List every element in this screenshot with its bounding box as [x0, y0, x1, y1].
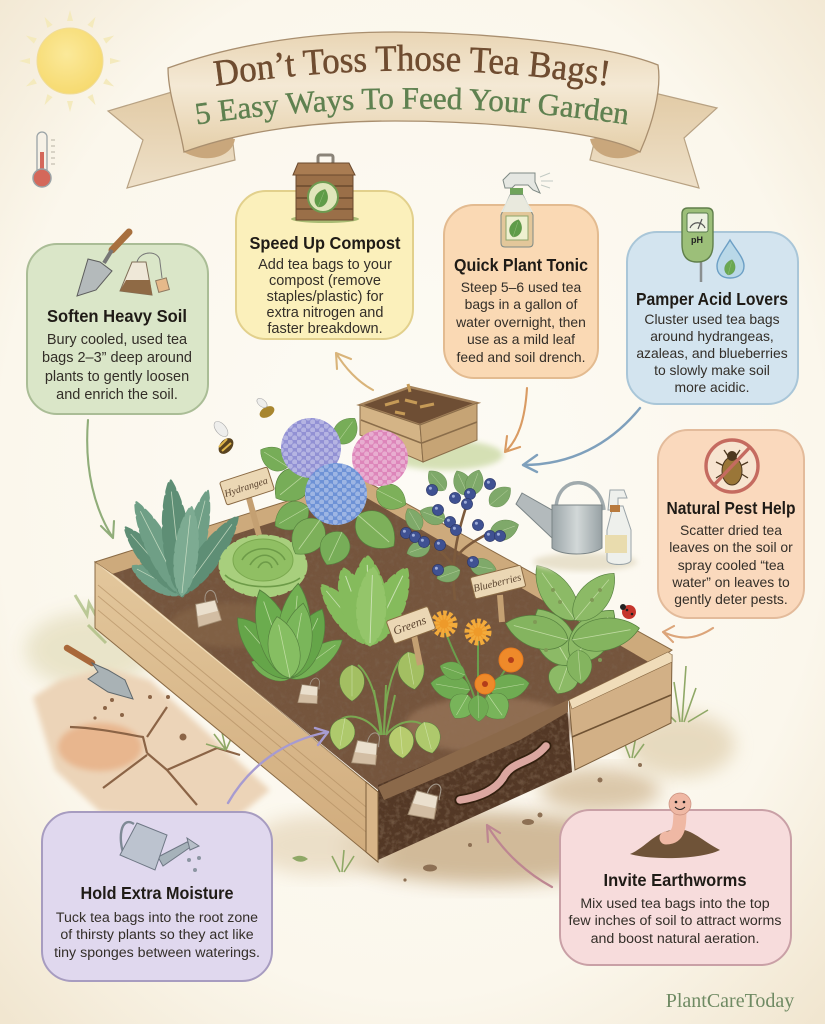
icon: watering can [120, 822, 201, 872]
icon: pH meter [682, 208, 713, 282]
panel: Speed Up Compost: extra nitrogen and [267, 305, 383, 321]
label: greens: Greens [391, 613, 428, 638]
grass tufts [206, 666, 708, 872]
plant: wilted seedling [327, 650, 444, 767]
label: hydrangea [220, 467, 274, 535]
icon: smiling worm in soil [630, 793, 720, 858]
panel: Pamper Acid Lovers: Cluster used tea bags [644, 311, 780, 327]
panel: Hold Extra Moisture: tiny sponges between waterings. [54, 945, 260, 961]
buried tea bag [408, 779, 443, 821]
panel: Quick Plant Tonic: Quick Plant Tonic [454, 255, 588, 275]
icon: pH meter: pH [691, 235, 703, 245]
panel: Natural Pest Help: spray cooled “tea [678, 557, 785, 573]
title banner [106, 31, 718, 189]
plant: kale [119, 481, 245, 601]
panel: Soften Heavy Soil [27, 232, 208, 414]
panel: Natural Pest Help: Scatter dried tea [680, 522, 782, 538]
title line 1: Don’t Toss Those Tea Bags! [213, 44, 608, 90]
plant: spotted leaf plant [501, 557, 642, 699]
illustration: ground wash [25, 595, 735, 884]
arrow: acid lovers [523, 408, 640, 472]
plant: marigolds [429, 615, 531, 726]
panel: Natural Pest Help [658, 430, 804, 618]
panel: Speed Up Compost: compost (remove [269, 273, 381, 289]
panel: Invite Earthworms: Invite Earthworms [604, 870, 747, 890]
grass along plank [75, 595, 137, 651]
icon: spray bottle [501, 173, 553, 247]
icon: thermometer [33, 132, 55, 187]
panel: Quick Plant Tonic: Steep 5–6 used tea [461, 279, 582, 295]
earthworm [460, 746, 546, 800]
icon: sun [19, 10, 121, 112]
icon: ladybug [620, 604, 636, 619]
panel: Soften Heavy Soil: plants to gently loosen [45, 369, 189, 385]
panel: Hold Extra Moisture: Hold Extra Moisture [80, 883, 234, 903]
panel: Natural Pest Help: Natural Pest Help [666, 498, 796, 518]
panel: Hold Extra Moisture: Tuck tea bags into the root zone [56, 910, 258, 926]
icon: bees [211, 396, 276, 457]
plant: romaine greens [314, 557, 418, 650]
bed long plank [95, 562, 378, 862]
panel: Soften Heavy Soil: Bury cooled, used tea [47, 332, 188, 348]
banner right tail [590, 92, 717, 188]
panel: Pamper Acid Lovers: around hydrangeas, [650, 328, 774, 344]
icon: watering can and spray bottle [516, 483, 637, 571]
label: blueberries: Blueberries [472, 572, 522, 595]
arrow: tonic [505, 388, 527, 452]
panel: Hold Extra Moisture [42, 812, 272, 981]
icon: no pest sign [706, 440, 758, 492]
plant: butter lettuce [221, 537, 305, 595]
bed right end panel [569, 655, 672, 770]
panel: Speed Up Compost: staples/plastic) for [267, 289, 384, 305]
panel: Soften Heavy Soil: Soften Heavy Soil [47, 306, 187, 326]
panel: Speed Up Compost: faster breakdown. [267, 321, 383, 337]
panel: Hold Extra Moisture: of thirsty plants so they act like [60, 927, 254, 943]
panel: Natural Pest Help: water” on leaves to [671, 574, 790, 590]
label: greens [386, 606, 436, 665]
banner left tail [108, 92, 235, 188]
plant: blueberry bush [400, 466, 522, 600]
icon: water drop [717, 240, 744, 278]
panel: Soften Heavy Soil: bags 2–3” deep around [42, 350, 192, 366]
label: blueberries [470, 565, 526, 622]
icon: trowel and tea bag [77, 232, 169, 296]
panel: Invite Earthworms [560, 793, 791, 965]
arrow: compost [336, 353, 373, 390]
panel: Invite Earthworms: few inches of soil to attract worms [569, 913, 781, 929]
panel: Quick Plant Tonic: water overnight, then [455, 314, 586, 330]
icon: compost bin [291, 155, 359, 223]
panel: Pamper Acid Lovers: azaleas, and blueberries [636, 345, 788, 361]
arrow: earthworms [487, 825, 552, 887]
panel: Quick Plant Tonic: feed and soil drench. [457, 349, 585, 365]
panel: Speed Up Compost: Add tea bags to your [258, 257, 392, 273]
cracked earth [33, 668, 270, 822]
banner ribbon [168, 32, 659, 152]
panel: Quick Plant Tonic: use as a mild leaf [467, 331, 575, 347]
panel: Pamper Acid Lovers: more acidic. [675, 379, 749, 395]
tea bags in soil [191, 589, 321, 705]
arrows [87, 353, 713, 887]
panel: Invite Earthworms: and boost natural aeration. [591, 931, 759, 947]
panel: Soften Heavy Soil: and enrich the soil. [56, 387, 178, 403]
illustration: raised garden bed [95, 478, 672, 862]
bed soil surface [112, 494, 652, 790]
panel: Speed Up Compost: Speed Up Compost [250, 233, 401, 253]
arrow: pest [663, 626, 713, 642]
title line 2: 5 Easy Ways To Feed Your Garden [196, 87, 628, 125]
watermark: PlantCareToday [666, 990, 794, 1012]
arrow: soften soil [87, 420, 114, 538]
soil specks [403, 763, 642, 882]
panel: Invite Earthworms: Mix used tea bags into the top [580, 896, 770, 912]
plant: hydrangeas [255, 412, 411, 571]
bed back rail [95, 478, 672, 665]
panel: Pamper Acid Lovers: to slowly make soil [654, 362, 770, 378]
panel: Speed Up Compost [236, 155, 413, 339]
panel: Pamper Acid Lovers: Pamper Acid Lovers [636, 289, 788, 309]
icon: small trowel on ground [67, 648, 133, 699]
panel: Natural Pest Help: leaves on the soil or [669, 539, 793, 555]
soil cutaway with worm [378, 700, 572, 860]
panel: Quick Plant Tonic [444, 173, 598, 378]
plant: spinach [226, 582, 349, 688]
label: hydrangea: Hydrangea [222, 475, 269, 500]
plant labels [220, 467, 526, 665]
panel: Quick Plant Tonic: bags in a gallon of [465, 296, 578, 312]
arrow: moisture [228, 728, 328, 803]
illustration: compost box [360, 384, 503, 470]
panel: Natural Pest Help: gently deter pests. [674, 591, 788, 607]
panel: Pamper Acid Lovers [627, 208, 798, 404]
